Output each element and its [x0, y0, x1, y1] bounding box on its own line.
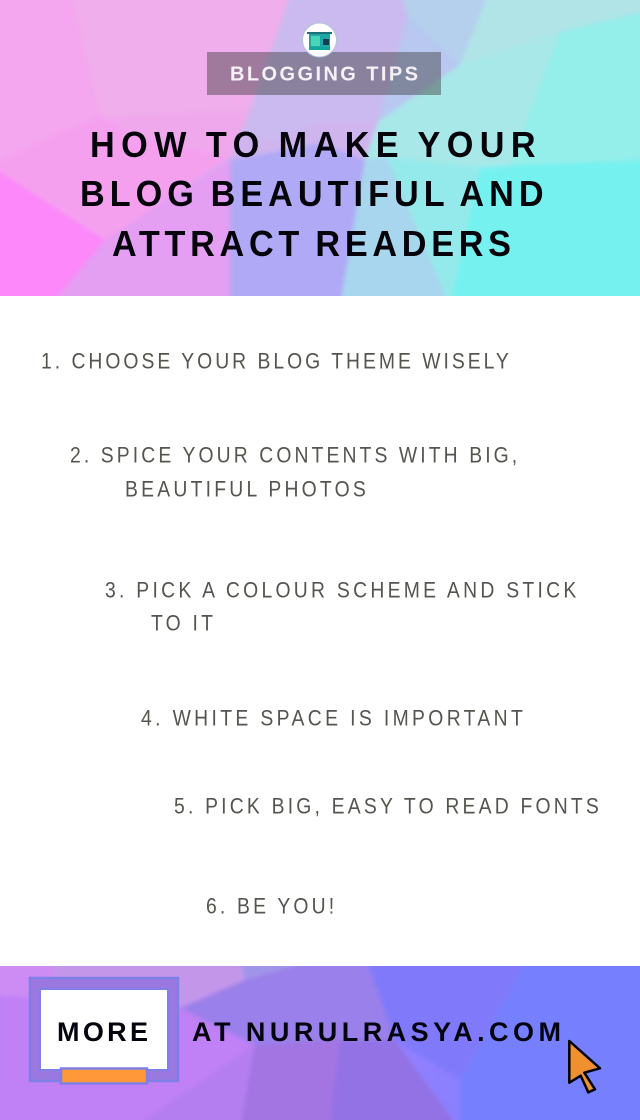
tip 3: 3. PICK A COLOUR SCHEME AND STICK	[105, 578, 576, 603]
title: HOW TO MAKE YOUR	[90, 125, 536, 165]
button face	[40, 989, 168, 1070]
icon: cursor arrow	[569, 1041, 600, 1092]
tip 3	[105, 578, 576, 636]
tip 2: 2. SPICE YOUR CONTENTS WITH BIG,	[70, 443, 517, 468]
title: BLOG BEAUTIFUL AND	[80, 174, 544, 214]
tip 3: TO IT	[151, 611, 213, 636]
more button	[30, 978, 178, 1084]
tip 5: 5. PICK BIG, EASY TO READ FONTS	[174, 794, 599, 819]
tag: blogging tips	[207, 52, 441, 95]
title: ATTRACT READERS	[112, 224, 511, 264]
tips list	[41, 349, 599, 919]
header low-poly background	[0, 0, 640, 306]
button frame	[30, 978, 178, 1081]
tip 2: BEAUTIFUL PHOTOS	[125, 477, 366, 502]
title	[80, 125, 544, 264]
header panel	[0, 0, 640, 306]
tip 2	[70, 443, 517, 502]
tip 4: 4. WHITE SPACE IS IMPORTANT	[141, 706, 523, 731]
footer panel	[0, 956, 640, 1120]
footer low-poly background	[0, 956, 640, 1120]
tip 6: 6. BE YOU!	[206, 894, 334, 919]
button label: MORE	[57, 1017, 148, 1047]
tag: blogging tips: BLOGGING TIPS	[230, 64, 418, 86]
website call to action: AT NURULRASYA.COM	[192, 1017, 561, 1047]
icon: blog window badge	[302, 23, 336, 57]
tip 1: 1. CHOOSE YOUR BLOG THEME WISELY	[41, 349, 509, 374]
orange tab	[61, 1068, 147, 1084]
